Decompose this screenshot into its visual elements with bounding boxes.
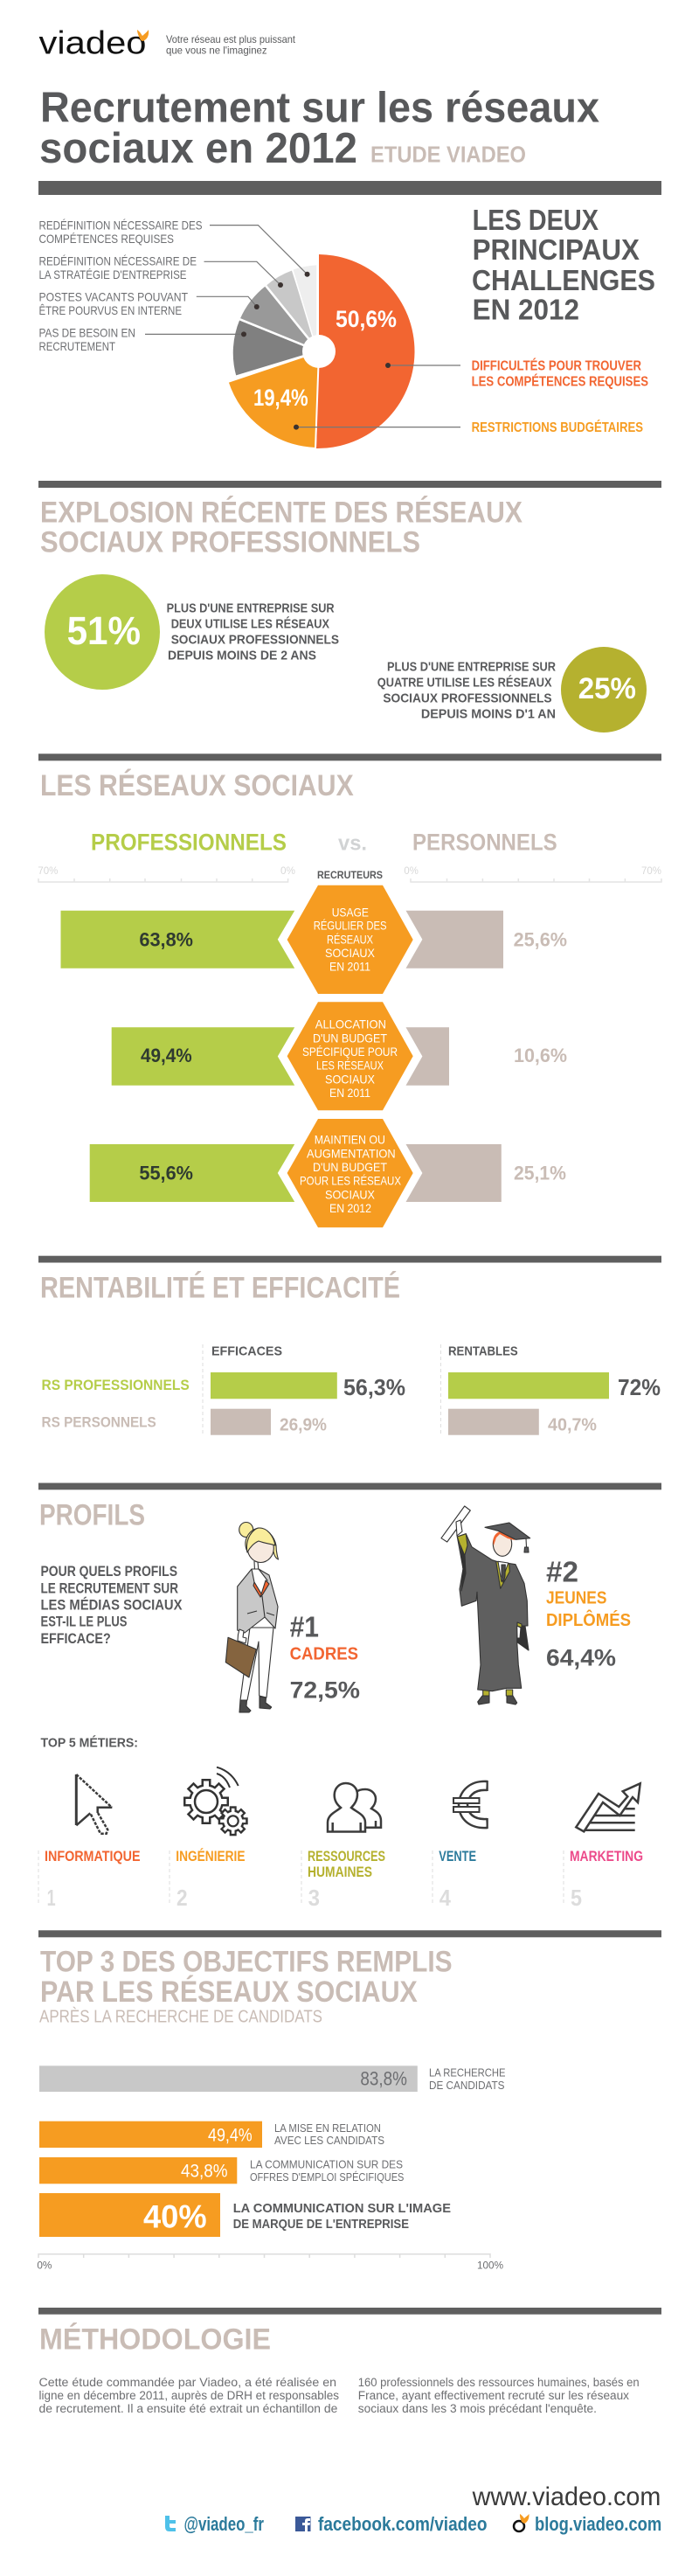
tagline: que vous ne l'imaginez — [166, 44, 267, 56]
pie labels left: REDÉFINITION NÉCESSAIRE DES — [38, 219, 203, 233]
method text right — [358, 2376, 640, 2415]
pie labels left: PAS DE BESOIN EN — [38, 325, 135, 339]
recruteurs label: RECRUTEURS — [317, 869, 383, 881]
panel: méthodologie — [38, 2323, 640, 2415]
facebook link: facebook.com/viadeo — [318, 2513, 488, 2535]
bars efficaces: 26,9% — [280, 1416, 327, 1435]
job labels: HUMAINES — [308, 1864, 372, 1880]
icon: twitter — [165, 2516, 176, 2531]
question: POUR QUELS PROFILS — [40, 1564, 177, 1580]
row 1: RÉGULIER DES — [314, 919, 386, 933]
text 51%: SOCIAUX PROFESSIONNELS — [171, 633, 339, 648]
job labels: INGÉNIERIE — [176, 1848, 245, 1864]
text 51% — [167, 601, 339, 663]
panel: explosion — [40, 496, 647, 733]
panel: profils — [38, 1498, 643, 1911]
diplômés stat: DIPLÔMÉS — [546, 1609, 631, 1630]
text 51%: PLUS D'UNE ENTREPRISE SUR — [167, 601, 335, 616]
website: www.viadeo.com — [472, 2482, 661, 2511]
method text right: France, ayant effectivement recruté sur les réseaux — [358, 2389, 629, 2402]
icon: facebook — [295, 2517, 311, 2531]
circle 51% — [45, 574, 160, 690]
column headers: RENTABLES — [448, 1344, 518, 1358]
text 25%: DEPUIS MOINS D'1 AN — [421, 706, 556, 721]
bar 43,8%: OFFRES D'EMPLOI SPÉCIFIQUES — [250, 2170, 405, 2184]
row 2 — [112, 1002, 567, 1110]
axes: 0% — [404, 864, 419, 877]
challenges labels: RESTRICTIONS BUDGÉTAIRES — [472, 419, 643, 435]
pie chart — [228, 254, 415, 448]
challenges heading: LES DEUX — [473, 204, 599, 236]
bar 40%: 40% — [143, 2198, 207, 2234]
bars efficaces: 56,3% — [343, 1374, 405, 1400]
bar 40% — [39, 2193, 451, 2237]
bar 49,4%: LA MISE EN RELATION — [274, 2121, 381, 2135]
cadres stat — [290, 1611, 360, 1703]
icon: euro — [453, 1781, 488, 1829]
row 3: SOCIAUX — [325, 1187, 376, 1201]
row labels: RS PERSONNELS — [42, 1413, 156, 1430]
row 2: ALLOCATION — [315, 1017, 386, 1031]
row 2: 49,4% — [141, 1045, 192, 1066]
axes: 0% — [280, 864, 295, 877]
row 2: D'UN BUDGET — [313, 1031, 387, 1045]
rank numbers: 5 — [571, 1885, 582, 1911]
column titles: vs. — [338, 832, 367, 856]
method text left — [38, 2376, 339, 2415]
panel: top 3 objectifs — [37, 1946, 506, 2272]
pie labels left — [38, 219, 203, 353]
challenges heading — [472, 204, 655, 325]
column headers — [211, 1344, 518, 1358]
circle 25% — [561, 647, 647, 733]
job labels: MARKETING — [570, 1848, 643, 1864]
job labels: VENTE — [439, 1848, 476, 1864]
illustration: businesswoman — [225, 1523, 278, 1712]
bar 43,8%: LA COMMUNICATION SUR DES — [250, 2157, 403, 2170]
bar 43,8% — [39, 2157, 405, 2184]
job labels: RESSOURCES — [308, 1848, 385, 1864]
rank numbers — [47, 1885, 582, 1911]
diplômés stat: #2 — [546, 1555, 578, 1587]
row 3: EN 2012 — [329, 1201, 371, 1215]
heading: MÉTHODOLOGIE — [39, 2323, 271, 2357]
title: sociaux en 2012 — [39, 125, 357, 172]
circle 51%: 51% — [67, 608, 141, 653]
pie labels left: REDÉFINITION NÉCESSAIRE DE — [38, 253, 197, 267]
row 1: RÉSEAUX — [327, 932, 374, 946]
pie labels left: RECRUTEMENT — [38, 339, 115, 353]
job labels — [45, 1848, 643, 1880]
challenges heading: PRINCIPAUX — [473, 233, 640, 266]
axes: 70% — [641, 864, 661, 877]
twitter handle: @viadeo_fr — [183, 2513, 264, 2535]
diplômés stat: JEUNES — [546, 1588, 606, 1607]
rank numbers: 4 — [439, 1885, 451, 1911]
row 2: SPÉCIFIQUE POUR — [302, 1045, 398, 1059]
explosion heading — [40, 496, 523, 559]
bar 40%: DE MARQUE DE L'ENTREPRISE — [233, 2217, 409, 2232]
column headers: EFFICACES — [211, 1344, 282, 1358]
column titles: PROFESSIONNELS — [91, 830, 287, 856]
icon: cursor — [76, 1774, 112, 1834]
row 2: SOCIAUX — [325, 1072, 376, 1086]
row 2: EN 2011 — [329, 1086, 370, 1100]
illustration: graduate — [441, 1506, 530, 1705]
method text right: 160 professionnels des ressources humaines, basés en — [358, 2376, 640, 2389]
panel: challenges pie — [38, 204, 655, 448]
icon: growth chart — [576, 1783, 640, 1831]
method text right: sociaux dans les 3 mois précédant l'enquête. — [358, 2402, 597, 2415]
method text left: Cette étude commandée par Viadeo, a été réalisée en — [38, 2376, 336, 2389]
axis: 0% — [37, 2260, 52, 2272]
bar 83,8%: 83,8% — [360, 2068, 407, 2090]
rank numbers: 3 — [308, 1885, 320, 1911]
heading: LES RÉSEAUX SOCIAUX — [40, 769, 354, 802]
bar 49,4%: 49,4% — [208, 2125, 253, 2145]
explosion heading: EXPLOSION RÉCENTE DES RÉSEAUX — [40, 496, 523, 530]
challenges heading: EN 2012 — [473, 294, 579, 325]
text 51%: DEPUIS MOINS DE 2 ANS — [168, 649, 316, 663]
row 1: 63,8% — [139, 928, 193, 950]
diplômés stat: 64,4% — [546, 1645, 616, 1671]
tagline: Votre réseau est plus puissant — [166, 33, 296, 45]
axis: 100% — [477, 2260, 503, 2272]
question — [40, 1564, 182, 1647]
text 25%: SOCIAUX PROFESSIONNELS — [383, 691, 552, 705]
title — [39, 85, 599, 172]
challenges labels: LES COMPÉTENCES REQUISES — [472, 373, 648, 390]
bar 83,8%: DE CANDIDATS — [429, 2079, 505, 2092]
row 3: POUR LES RÉSEAUX — [300, 1174, 402, 1188]
column titles: PERSONNELS — [412, 830, 557, 856]
row 1 — [61, 885, 567, 994]
leader dots — [241, 272, 391, 430]
cadres stat: 72,5% — [290, 1677, 360, 1703]
text 25%: QUATRE UTILISE LES RÉSEAUX — [377, 675, 552, 690]
icon: viadeo — [514, 2514, 529, 2531]
pie labels left: ÊTRE POURVUS EN INTERNE — [38, 303, 182, 317]
bar 40%: LA COMMUNICATION SUR L'IMAGE — [233, 2201, 451, 2216]
row 1: USAGE — [332, 905, 369, 919]
bars rentables: 40,7% — [548, 1416, 597, 1435]
pie chart: 19,4% — [253, 385, 308, 411]
question: LE RECRUTEMENT SUR — [40, 1580, 178, 1596]
axes: 70% — [38, 864, 59, 877]
explosion heading: SOCIAUX PROFESSIONNELS — [40, 526, 420, 559]
method text left: de recrutement. Il a ensuite été extrait un échantillon de — [38, 2402, 337, 2415]
bars rentables — [448, 1372, 661, 1435]
title: Recrutement sur les réseaux — [40, 85, 599, 132]
heading: RENTABILITÉ ET EFFICACITÉ — [40, 1271, 400, 1304]
rank numbers: 2 — [176, 1885, 188, 1911]
question: EFFICACE? — [40, 1631, 111, 1647]
row 2: LES RÉSEAUX — [316, 1059, 384, 1073]
bar 83,8%: LA RECHERCHE — [429, 2066, 506, 2079]
row 3: MAINTIEN OU — [315, 1133, 385, 1147]
header logo: viadeo — [38, 24, 147, 60]
row 1: EN 2011 — [329, 960, 370, 974]
rank numbers: 1 — [47, 1885, 56, 1911]
panel: rentabilité et efficacité — [40, 1271, 661, 1435]
text 25% — [377, 659, 556, 721]
panel: réseaux sociaux comparison — [38, 769, 661, 1227]
title: ETUDE VIADEO — [370, 142, 526, 168]
method text left: ligne en décembre 2011, auprès de DRH et responsables — [38, 2389, 339, 2402]
row 3: AUGMENTATION — [307, 1146, 396, 1160]
leader lines — [145, 226, 460, 427]
heading: TOP 3 DES OBJECTIFS REMPLIS — [40, 1946, 453, 1979]
row labels — [42, 1377, 190, 1430]
row 2: 10,6% — [514, 1045, 567, 1066]
challenges labels — [472, 357, 648, 435]
question: EST-IL LE PLUS — [40, 1614, 128, 1630]
heading: PAR LES RÉSEAUX SOCIAUX — [40, 1975, 418, 2009]
axis — [37, 2254, 503, 2272]
challenges heading: CHALLENGES — [472, 264, 655, 296]
row 3: 25,1% — [514, 1162, 566, 1184]
footer — [165, 2482, 661, 2535]
row 1: SOCIAUX — [325, 946, 376, 960]
tagline — [166, 33, 296, 56]
bar 43,8%: 43,8% — [181, 2162, 228, 2182]
job labels: INFORMATIQUE — [45, 1848, 140, 1864]
icon: gears — [183, 1767, 248, 1836]
row labels: RS PROFESSIONNELS — [42, 1377, 190, 1393]
bar 83,8% — [39, 2066, 506, 2092]
bars efficaces — [211, 1372, 405, 1435]
text 51%: DEUX UTILISE LES RÉSEAUX — [171, 617, 329, 632]
heading — [40, 1946, 453, 2009]
column titles — [91, 830, 557, 856]
bar 49,4% — [39, 2121, 384, 2148]
pie labels left: POSTES VACANTS POUVANT — [38, 290, 188, 304]
bars rentables: 72% — [618, 1374, 661, 1400]
heading: PROFILS — [39, 1498, 145, 1531]
blog link: blog.viadeo.com — [535, 2513, 661, 2535]
question: LES MÉDIAS SOCIAUX — [40, 1597, 182, 1614]
pie chart: 50,6% — [336, 306, 397, 332]
icon: people — [328, 1783, 381, 1832]
text 25%: PLUS D'UNE ENTREPRISE SUR — [387, 659, 556, 674]
row 3: D'UN BUDGET — [313, 1160, 387, 1174]
axes — [38, 864, 661, 882]
top 5 heading: TOP 5 MÉTIERS: — [40, 1736, 138, 1751]
row 3 — [90, 1119, 566, 1227]
pie labels left: COMPÉTENCES REQUISES — [38, 232, 174, 246]
cadres stat: #1 — [290, 1611, 319, 1643]
row 1: 25,6% — [514, 928, 567, 950]
bar 49,4%: AVEC LES CANDIDATS — [274, 2134, 384, 2147]
row 3: 55,6% — [139, 1162, 193, 1184]
diplômés stat — [546, 1555, 631, 1671]
pie labels left: LA STRATÉGIE D'ENTREPRISE — [38, 267, 187, 281]
cadres stat: CADRES — [290, 1644, 358, 1663]
subheading: APRÈS LA RECHERCHE DE CANDIDATS — [39, 2007, 322, 2027]
circle 25%: 25% — [578, 672, 636, 705]
challenges labels: DIFFICULTÉS POUR TROUVER — [472, 357, 641, 373]
